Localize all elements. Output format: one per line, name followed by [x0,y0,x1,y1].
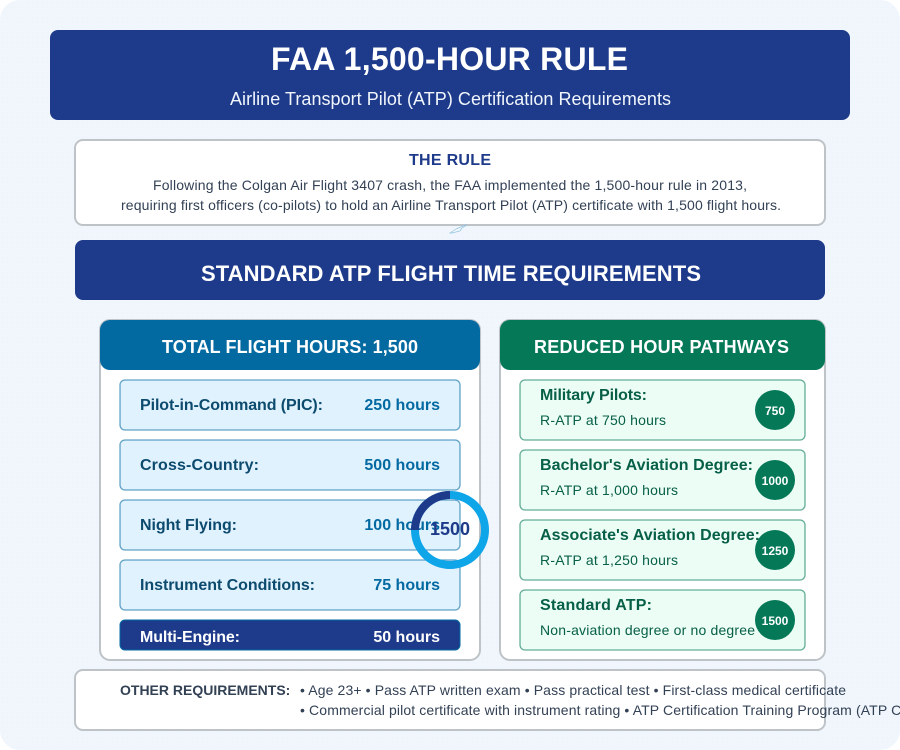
pathway: standard ATP: Standard ATP: [540,597,652,614]
pathway: associate's aviation degree: 1250 [762,544,789,558]
other requirements list [300,682,900,718]
pathway: standard ATP [520,590,805,650]
pathway: military pilots: R-ATP at 750 hours [540,412,666,428]
panel header: total flight hours [100,320,480,370]
rule body text: requiring first officers (co-pilots) to hold an Airline Transport Pilot (ATP) certificate with 1,500 flight hours. [121,197,781,213]
other requirements list: • Age 23+ • Pass ATP written exam • Pass practical test • First-class medical certificate [300,682,846,698]
row: instrument conditions: Instrument Conditions: [140,577,315,594]
pathway: military pilots [520,380,805,440]
row: night flying: Night Flying: [140,517,237,534]
section banner: standard ATP flight time requirements: STANDARD ATP FLIGHT TIME REQUIREMENTS [201,261,701,286]
other requirements heading: OTHER REQUIREMENTS: [120,682,290,698]
rule heading: THE RULE [409,152,491,169]
title: FAA 1,500-HOUR RULE [271,41,628,77]
row: night flying [120,500,460,550]
pathway: military pilots: Military Pilots: [540,387,647,404]
pathway: bachelor's aviation degree: Bachelor's Aviation Degree: [540,457,753,474]
subtitle: Airline Transport Pilot (ATP) Certification Requirements [230,89,671,109]
panel header: reduced hour pathways: REDUCED HOUR PATHWAYS [534,337,789,357]
section banner: standard ATP flight time requirements [75,240,825,300]
rule body text: Following the Colgan Air Flight 3407 crash, the FAA implemented the 1,500-hour rule in 2013, [153,177,747,193]
row: multi-engine: Multi-Engine: [140,629,240,646]
pathway: military pilots: 750 [765,404,785,418]
pathway: associate's aviation degree: R-ATP at 1,250 hours [540,552,678,568]
row: instrument conditions [120,560,460,610]
rule body text [121,177,781,213]
row: cross-country: 500 hours [364,457,440,474]
pathway: standard ATP: 1500 [762,614,789,628]
panel: total flight hours [100,320,480,660]
pathway: bachelor's aviation degree: 1000 [762,474,789,488]
icon: small plane outline [450,225,467,233]
row: cross-country: Cross-Country: [140,457,259,474]
row: pilot-in-command: Pilot-in-Command (PIC): [140,397,323,414]
row: multi-engine [120,620,460,650]
panel header: reduced hour pathways [500,320,825,370]
title banner [50,30,850,120]
pathway: bachelor's aviation degree: R-ATP at 1,000 hours [540,482,678,498]
pathway: bachelor's aviation degree [520,450,805,510]
panel: the rule [75,140,825,225]
pathway: standard ATP: Non-aviation degree or no degree [540,622,755,638]
row: pilot-in-command [120,380,460,430]
pathway: associate's aviation degree: Associate's Aviation Degree: [540,527,760,544]
chart: 1500 hour progress ring: 1500 [430,519,470,539]
panel: reduced hour pathways [500,320,825,660]
chart: 1500 hour progress ring [415,495,485,565]
row: instrument conditions: 75 hours [373,577,440,594]
row: night flying: 100 hours [364,517,440,534]
row: multi-engine: 50 hours [373,629,440,646]
row: pilot-in-command: 250 hours [364,397,440,414]
panel: other requirements [75,670,900,730]
panel header: total flight hours: TOTAL FLIGHT HOURS: 1,500 [162,337,418,357]
pathway: associate's aviation degree [520,520,805,580]
row: cross-country [120,440,460,490]
